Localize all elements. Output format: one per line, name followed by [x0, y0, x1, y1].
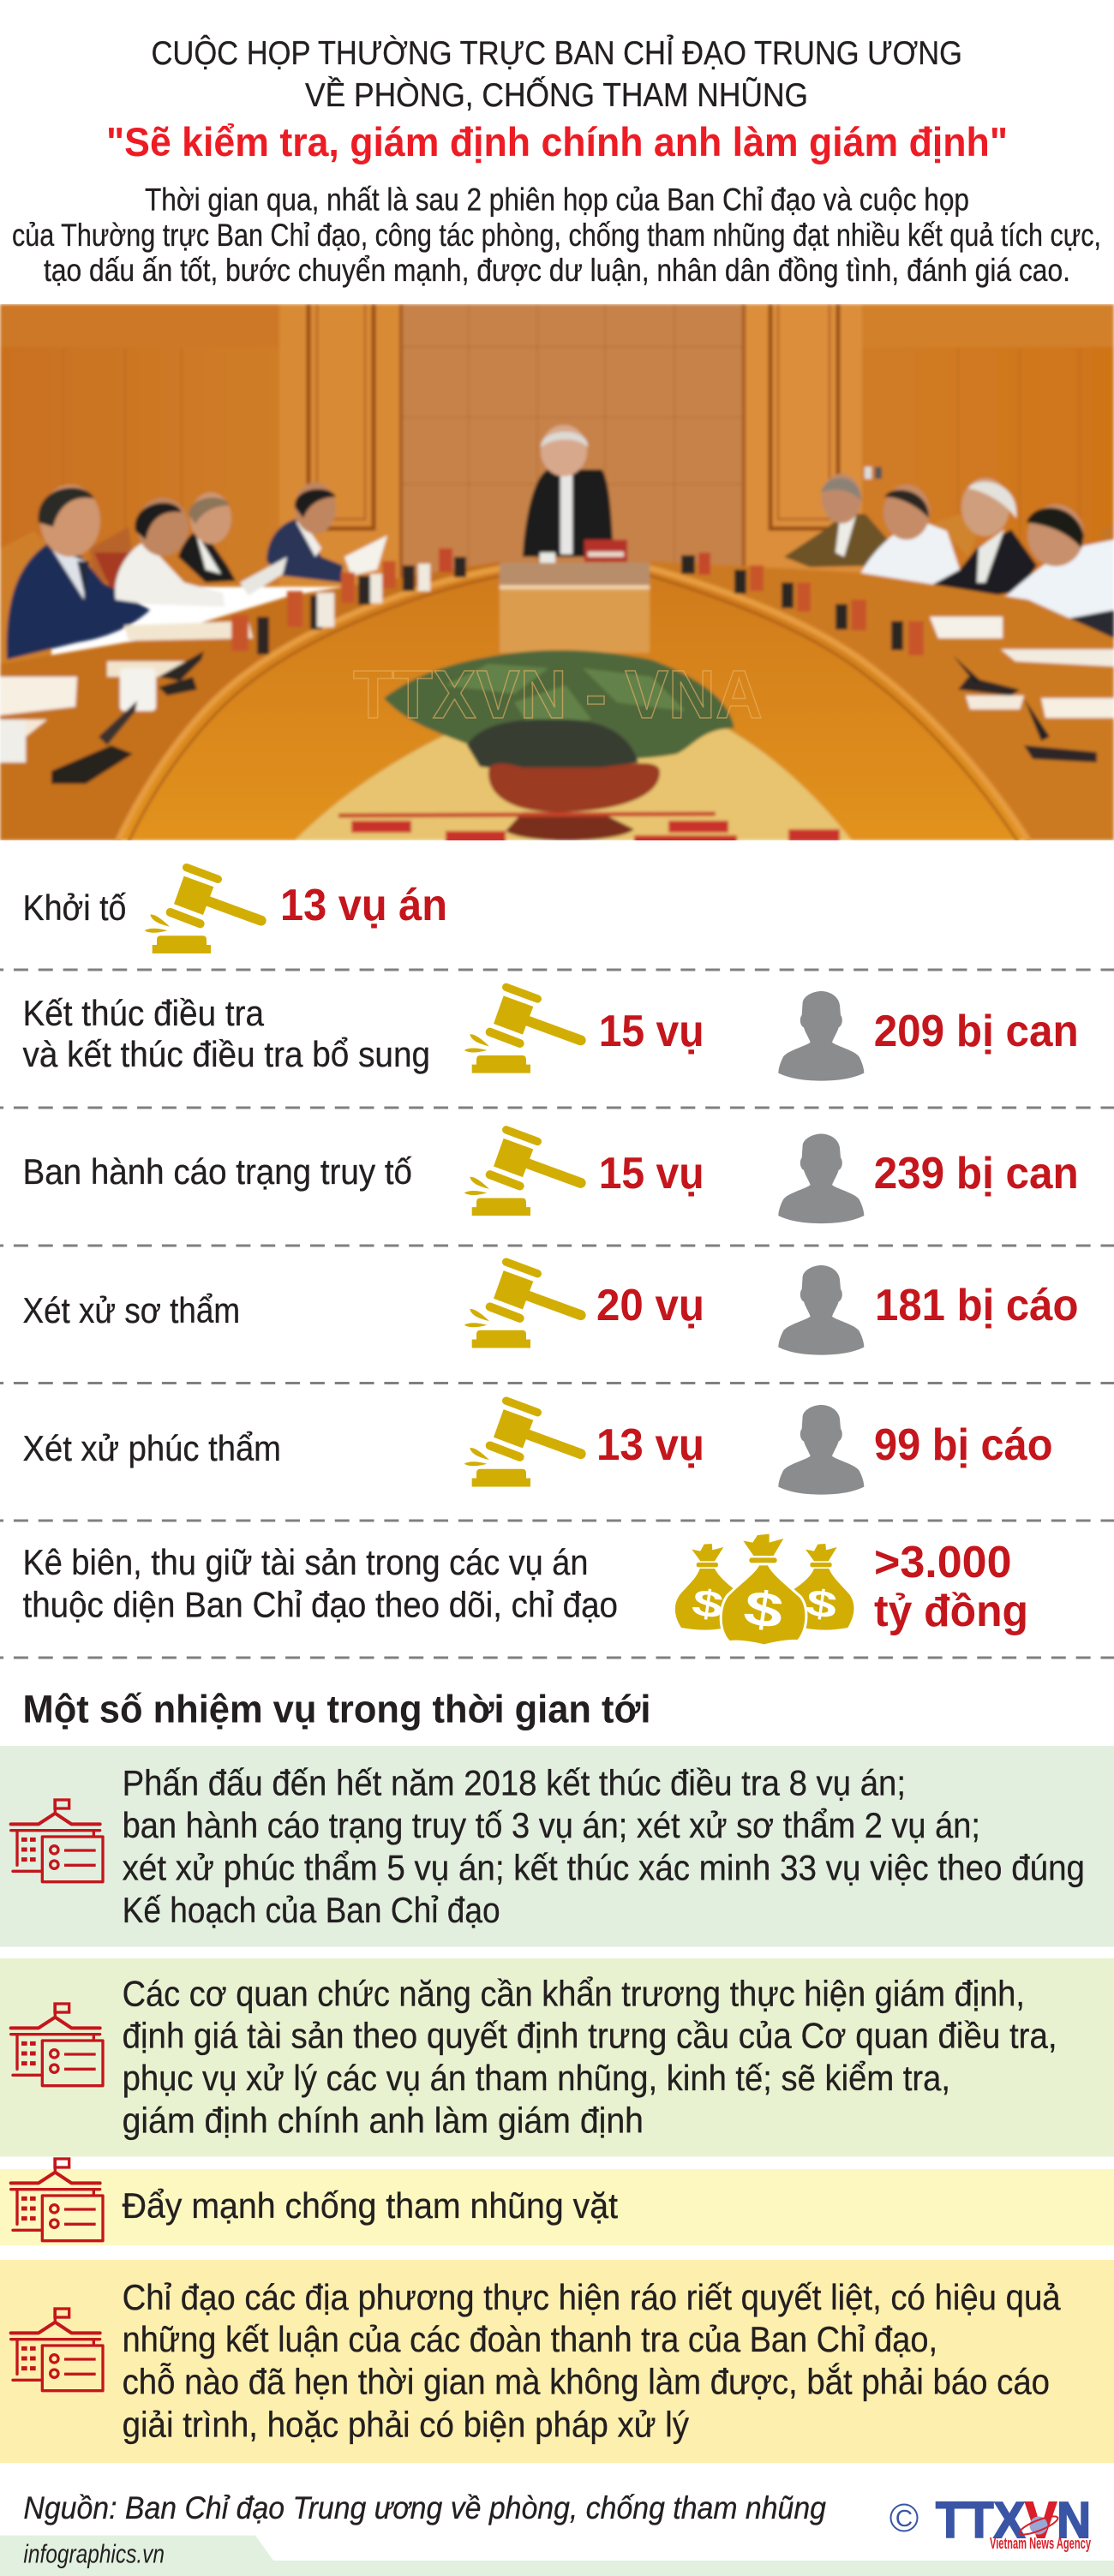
row: Kê biên, thu giữ tài sản: thuộc diện Ban Chỉ đạo theo dõi, chỉ đạo	[22, 1585, 618, 1624]
bonsai and pot	[384, 650, 734, 840]
icon: gavel	[464, 1262, 581, 1348]
row: Xét xử sơ thẩm: Xét xử sơ thẩm	[22, 1290, 240, 1330]
source line: Nguồn: Ban Chỉ đạo Trung ương về phòng, chống tham nhũng	[23, 2490, 826, 2525]
text block: Đẩy mạnh chống tham nhũng vặt	[123, 2185, 618, 2226]
logo: TTXVN: TTXVN	[936, 2492, 1091, 2549]
icon: building	[11, 1799, 103, 1882]
stat: >3.000 tỷ đồng: >3.000	[874, 1538, 1011, 1587]
stat: >3.000 tỷ đồng: tỷ đồng	[874, 1587, 1028, 1636]
row: Kết thúc điều tra	[22, 987, 1079, 1081]
right delegates	[784, 474, 1114, 647]
panel: task 3	[0, 2158, 1114, 2245]
text block: Các cơ quan chức năng cần khẩn trương thực hiện giám định,	[123, 1973, 1025, 2013]
row: Ban hành cáo trạng truy tố	[22, 1130, 1079, 1223]
row: Kết thúc điều tra: và kết thúc điều tra bổ sung	[22, 1034, 430, 1074]
text block	[123, 1973, 1057, 2140]
conference table	[0, 561, 1114, 842]
stat: 13 vụ: 13 vụ	[596, 1420, 704, 1470]
chairs	[0, 514, 1114, 668]
row: Xét xử phúc thẩm: Xét xử phúc thẩm	[22, 1428, 281, 1468]
text block	[123, 2277, 1061, 2445]
text block: Phấn đấu đến hết năm 2018 kết thúc điều tra 8 vụ án;	[123, 1763, 906, 1803]
icon: person	[778, 1405, 864, 1495]
icon: gavel	[464, 1130, 581, 1216]
title: CUỘC HỌP THƯỜNG TRỰC BAN CHỈ ĐẠO TRUNG ƯƠNG	[151, 34, 962, 72]
text block: phục vụ xử lý các vụ án tham nhũng, kinh tế; sẽ kiểm tra,	[123, 2058, 950, 2098]
icon: money bags: $	[803, 1581, 840, 1628]
copyright mark	[891, 2505, 917, 2531]
title: VỀ PHÒNG, CHỐNG THAM NHŨNG	[305, 75, 808, 114]
icon: person	[778, 1265, 864, 1355]
row: Kết thúc điều tra: Kết thúc điều tra	[22, 993, 265, 1033]
row: Xét xử phúc thẩm	[22, 1401, 1052, 1495]
row: Khởi tố: Khởi tố	[22, 888, 127, 928]
panel: task 4	[0, 2260, 1114, 2463]
papers, cups and microphones	[0, 548, 1114, 784]
icon: money bags: $	[740, 1580, 787, 1640]
icon: building	[11, 2158, 103, 2241]
stat: 209 bị can: 209 bị can	[874, 1007, 1079, 1056]
carpet stripes	[338, 814, 840, 844]
footer band	[0, 2536, 1114, 2576]
text block: định giá tài sản theo quyết định trưng cầu của Cơ quan điều tra,	[123, 2016, 1057, 2056]
row: Kê biên, thu giữ tài sản	[22, 1534, 1028, 1644]
text block: những kết luận của các đoàn thanh tra của Ban Chỉ đạo,	[123, 2319, 937, 2359]
row: Khởi tố	[22, 868, 447, 953]
stat: 13 vụ án: 13 vụ án	[280, 881, 447, 930]
stat: >3.000 tỷ đồng	[874, 1538, 1028, 1636]
stat: 15 vụ: 15 vụ	[599, 1149, 704, 1198]
stat: 15 vụ: 15 vụ	[599, 1007, 704, 1056]
red subtitle: "Sẽ kiểm tra, giám định chính anh làm giám định"	[106, 119, 1008, 164]
icon: money bags: $	[690, 1581, 726, 1628]
icon: person	[778, 1133, 864, 1223]
stat: 99 bị cáo: 99 bị cáo	[874, 1420, 1052, 1470]
icon: building	[11, 2308, 103, 2391]
text block: chỗ nào đã hẹn thời gian mà không làm được, bắt phải báo cáo	[123, 2362, 1050, 2402]
photo: meeting room	[0, 304, 1114, 844]
row: Xét xử sơ thẩm	[22, 1262, 1078, 1355]
copyright mark: C	[895, 2505, 913, 2531]
icon: money bags	[675, 1534, 853, 1644]
text block: giải trình, hoặc phải có biện pháp xử lý	[123, 2405, 689, 2445]
text block: giám định chính anh làm giám định	[123, 2101, 644, 2140]
speaker at the podium	[523, 425, 627, 568]
panel: task 1	[0, 1746, 1114, 1946]
icon: gavel	[145, 868, 261, 953]
left delegates	[7, 482, 387, 660]
row: Kê biên, thu giữ tài sản: Kê biên, thu giữ tài sản trong các vụ án	[22, 1542, 588, 1582]
text block: ban hành cáo trạng truy tố 3 vụ án; xét xử sơ thẩm 2 vụ án;	[123, 1805, 980, 1845]
stat: 239 bị can: 239 bị can	[874, 1149, 1079, 1198]
stat: 181 bị cáo: 181 bị cáo	[875, 1281, 1078, 1330]
website label: infographics.vn	[23, 2539, 165, 2569]
intro text block	[12, 182, 1101, 288]
heading: tasks: Một số nhiệm vụ trong thời gian tới	[22, 1688, 651, 1731]
stat: 20 vụ: 20 vụ	[596, 1281, 704, 1330]
icon: gavel	[464, 1401, 581, 1486]
icon: person	[778, 991, 864, 1081]
icon: building	[11, 2003, 103, 2086]
intro text block: Thời gian qua, nhất là sau 2 phiên họp của Ban Chỉ đạo và cuộc họp	[145, 182, 969, 218]
watermark: TTXVN - VNA	[353, 656, 763, 732]
text block	[123, 1763, 1085, 1930]
panel: task 2	[0, 1958, 1114, 2157]
icon: gavel	[464, 987, 581, 1073]
text block: Kế hoạch của Ban Chỉ đạo	[123, 1890, 500, 1930]
row: Ban hành cáo trạng truy tố: Ban hành cáo trạng truy tố	[22, 1151, 412, 1192]
title	[151, 34, 962, 114]
wood wall	[0, 304, 1114, 595]
